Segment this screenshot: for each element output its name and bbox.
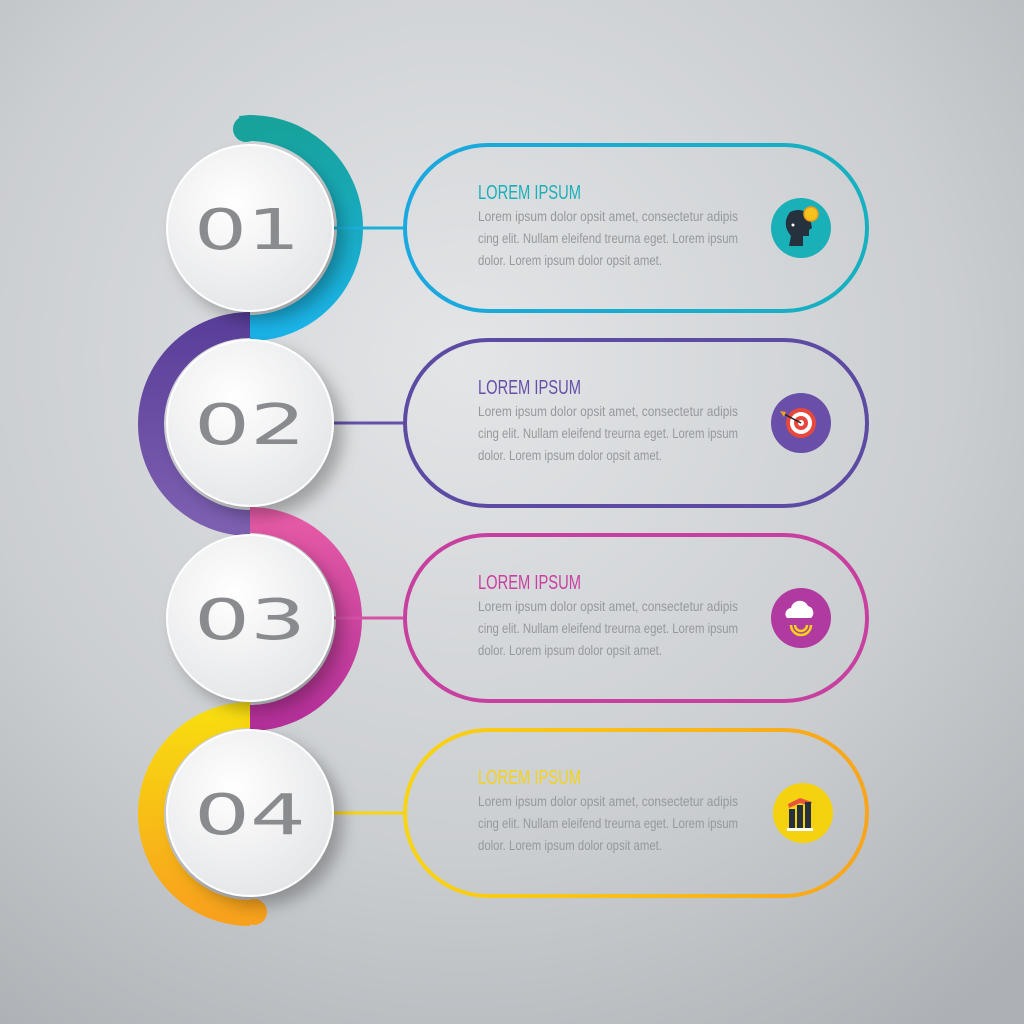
text 2: Lorem ipsum dolor opsit amet, consectetur adipis bbox=[478, 403, 738, 419]
text 3: cing elit. Nullam eleifend treurna eget. Lorem ipsum bbox=[478, 620, 738, 636]
text 3 bbox=[478, 598, 738, 658]
heading 3: LOREM IPSUM bbox=[478, 572, 581, 594]
text 1: cing elit. Nullam eleifend treurna eget. Lorem ipsum bbox=[478, 230, 738, 246]
arc 1 bbox=[241, 128, 350, 328]
panel 4 bbox=[405, 730, 867, 896]
text 4: dolor. Lorem ipsum dolor opsit amet. bbox=[478, 837, 662, 853]
heading 4: LOREM IPSUM bbox=[478, 767, 581, 789]
number circle 04: 04 bbox=[194, 783, 306, 848]
text 1 bbox=[478, 208, 738, 268]
heading 1: LOREM IPSUM bbox=[478, 182, 581, 204]
icon: target bbox=[771, 393, 831, 453]
text 2: cing elit. Nullam eleifend treurna eget. Lorem ipsum bbox=[478, 425, 738, 441]
number circle 02: 02 bbox=[194, 393, 306, 458]
icon: cloud wifi bbox=[771, 588, 831, 648]
number circle 03 bbox=[167, 535, 333, 701]
icon: bar chart bbox=[773, 783, 833, 843]
arc 4 bbox=[151, 715, 250, 913]
icon: head with bulb bbox=[771, 198, 831, 258]
connectors bbox=[333, 226, 404, 230]
text 4 bbox=[478, 793, 738, 853]
heading 2: LOREM IPSUM bbox=[478, 377, 581, 399]
text 3: dolor. Lorem ipsum dolor opsit amet. bbox=[478, 642, 662, 658]
arc 2 bbox=[151, 325, 250, 523]
text 4: cing elit. Nullam eleifend treurna eget. Lorem ipsum bbox=[478, 815, 738, 831]
panel 3 bbox=[405, 535, 867, 701]
number circle 02 bbox=[167, 340, 333, 506]
number circle 01 bbox=[167, 145, 333, 311]
arc 3 bbox=[250, 520, 349, 718]
text 2 bbox=[478, 403, 738, 463]
panel 1 bbox=[405, 145, 867, 311]
number circle 04 bbox=[167, 730, 333, 896]
text 1: Lorem ipsum dolor opsit amet, consectetur adipis bbox=[478, 208, 738, 224]
number circle 01: 01 bbox=[194, 198, 300, 263]
panel 2 bbox=[405, 340, 867, 506]
text 3: Lorem ipsum dolor opsit amet, consectetur adipis bbox=[478, 598, 738, 614]
text 1: dolor. Lorem ipsum dolor opsit amet. bbox=[478, 252, 662, 268]
text 4: Lorem ipsum dolor opsit amet, consectetur adipis bbox=[478, 793, 738, 809]
text 2: dolor. Lorem ipsum dolor opsit amet. bbox=[478, 447, 662, 463]
number circle 03: 03 bbox=[194, 588, 306, 653]
